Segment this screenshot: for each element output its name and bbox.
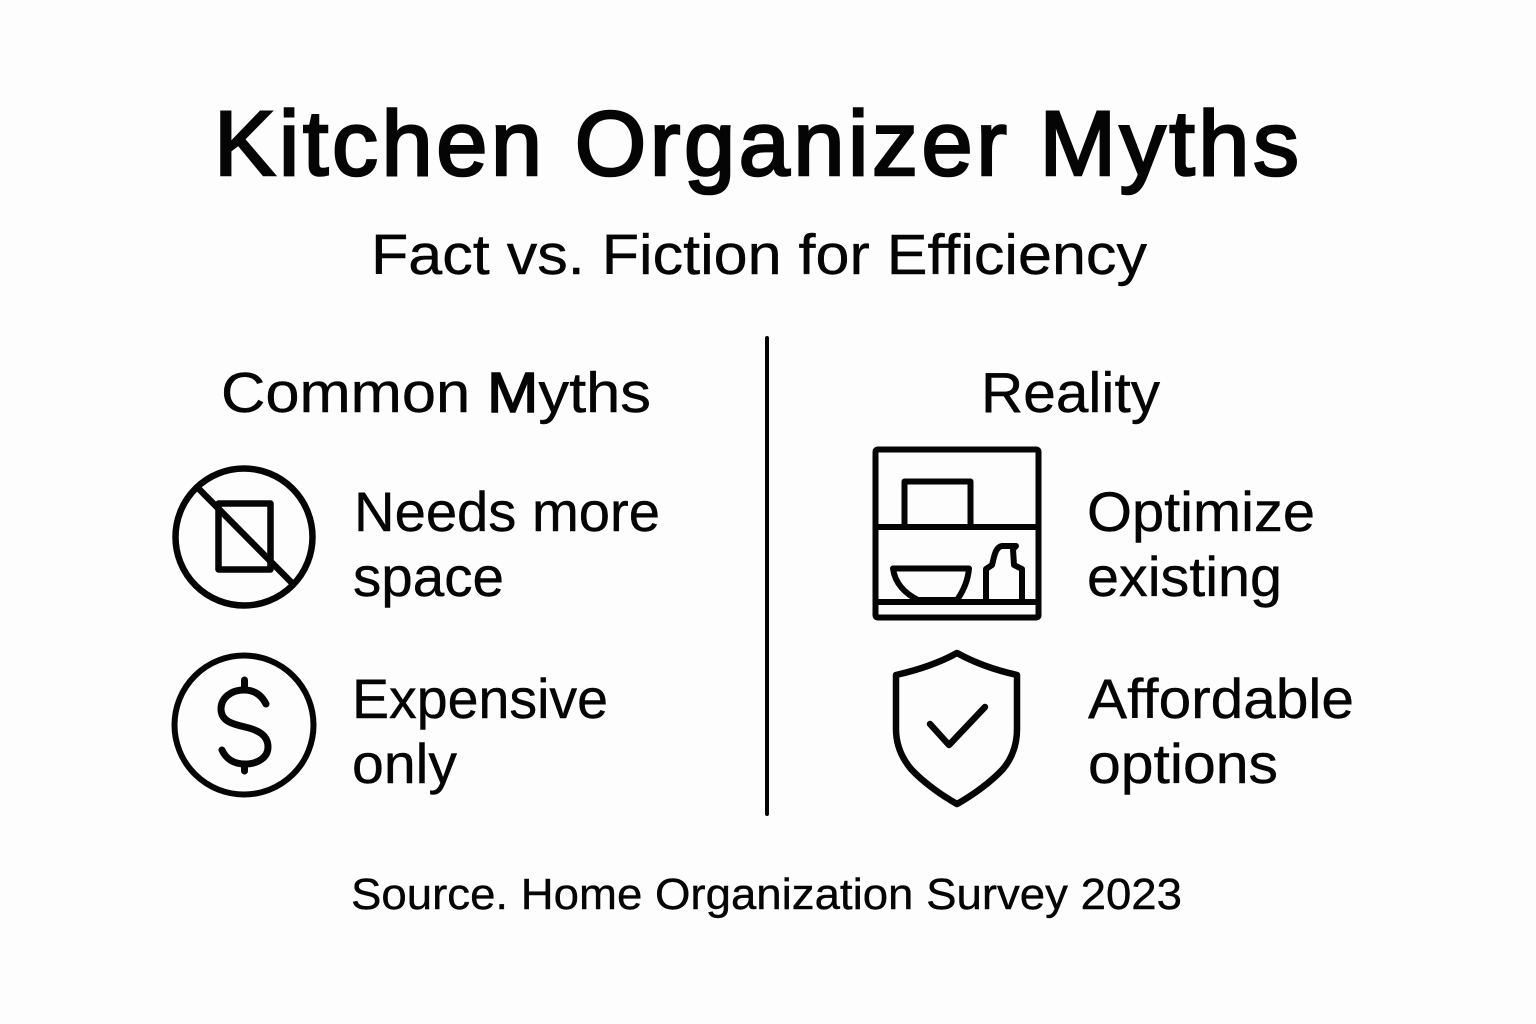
heading: common myths: Common Myths: [221, 361, 651, 425]
myth text: needs more space: [353, 480, 660, 608]
center divider: [765, 338, 769, 814]
icon: dollar coin: [174, 656, 314, 794]
icon: organized shelf: [876, 450, 1038, 618]
heading: reality: Reality: [981, 361, 1161, 425]
icon: shield with check: [896, 653, 1017, 804]
reality text: optimize existing: existing: [1087, 545, 1282, 608]
source note: Source. Home Organization Survey 2023: [351, 870, 1182, 919]
myth text: needs more space: Needs more: [354, 480, 660, 543]
myth text: expensive only: Expensive: [352, 667, 608, 730]
reality text: affordable options: [1088, 667, 1354, 795]
myth text: expensive only: [352, 667, 608, 795]
title: Kitchen Organizer Myths: [214, 93, 1299, 195]
reality text: affordable options: options: [1088, 732, 1278, 795]
myth text: expensive only: only: [352, 732, 457, 795]
subtitle: Fact vs. Fiction for Efficiency: [371, 223, 1148, 287]
reality text: affordable options: Affordable: [1088, 667, 1354, 730]
reality text: optimize existing: [1087, 480, 1315, 608]
myth text: needs more space: space: [353, 545, 504, 608]
reality text: optimize existing: Optimize: [1087, 480, 1315, 543]
icon: crossed-out square: [176, 468, 312, 606]
